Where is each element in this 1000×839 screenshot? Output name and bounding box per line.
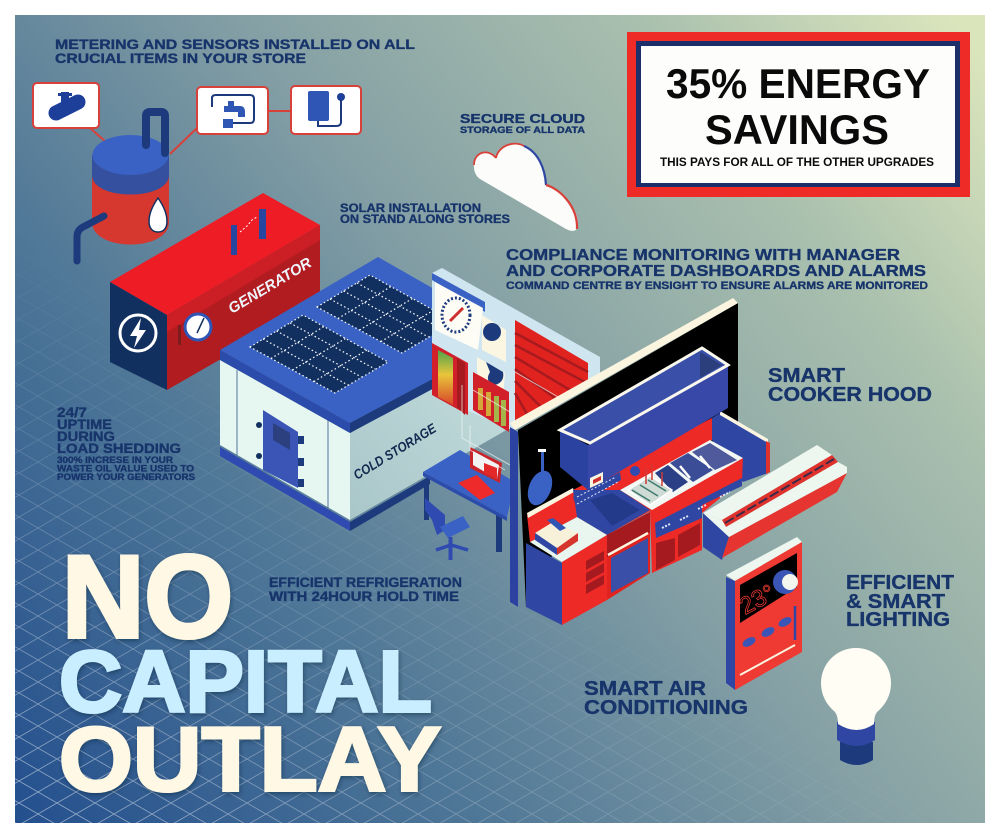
generator label: GENERATOR (225, 254, 315, 317)
icon: water tap sensor (197, 87, 268, 134)
icon: lightning bolt (120, 315, 156, 351)
callout: 35% energy savings (627, 32, 970, 197)
connector lines for sensors (90, 111, 291, 154)
icon: wall sensor device (291, 86, 361, 134)
generator (110, 193, 320, 390)
kitchen counter (526, 418, 743, 625)
temperature readout: 23° (735, 579, 780, 620)
label: uptime: UPTIME (57, 416, 112, 432)
keyboard (458, 475, 495, 500)
icon: cloud (474, 144, 578, 231)
label: efficient lighting: LIGHTING (846, 609, 950, 631)
label: uptime: 24/7 (57, 404, 87, 420)
label: smart air conditioning: SMART AIR (584, 678, 707, 700)
thermostat buttons (741, 615, 793, 649)
label: solar installation: SOLAR INSTALLATION (340, 201, 481, 215)
building label: COLD STORAGE (351, 420, 439, 483)
label: uptime: WASTE OIL VALUE USED TO (57, 464, 194, 474)
label: smart air conditioning (584, 678, 748, 719)
computer monitor (470, 447, 502, 483)
title: no capital outlay: CAPITAL (59, 634, 432, 730)
heading: metering and sensors: METERING AND SENSORS INSTALLED ON ALL (55, 37, 415, 52)
pie card (477, 357, 505, 397)
sink (620, 440, 743, 510)
label: efficient refrigeration: WITH 24HOUR HOLD TIME (269, 589, 459, 604)
label: efficient lighting (846, 572, 954, 631)
label: uptime: DURING (57, 428, 115, 444)
label: uptime: POWER YOUR GENERATORS (57, 472, 195, 482)
till (535, 518, 578, 555)
label: solar installation: ON STAND ALONG STORES (340, 212, 510, 226)
label: efficient refrigeration: EFFICIENT REFRIGERATION (269, 575, 462, 590)
callout: 35% energy savings: THIS PAYS FOR ALL OF THE OTHER UPGRADES (660, 157, 934, 169)
label: secure cloud: SECURE CLOUD (460, 111, 585, 126)
desk chair (425, 498, 470, 560)
data connector lines (462, 372, 560, 470)
oven (607, 512, 650, 600)
kitchen wall (510, 298, 738, 607)
cold storage building (220, 257, 515, 531)
heading: metering and sensors (55, 37, 415, 66)
label: secure cloud (460, 111, 586, 135)
bar chart (473, 372, 509, 432)
label: efficient lighting: EFFICIENT (846, 572, 954, 594)
callout: 35% energy savings: 35% ENERGY (666, 60, 930, 107)
icon: light bulb (821, 648, 891, 765)
desk with computer (423, 447, 515, 552)
heading: metering and sensors: CRUCIAL ITEMS IN YOUR STORE (55, 51, 306, 66)
air conditioner unit (703, 445, 847, 560)
label: smart cooker hood (768, 365, 932, 406)
label: secure cloud: STORAGE OF ALL DATA (460, 125, 586, 135)
cooker hood (560, 348, 728, 490)
label: compliance monitoring: AND CORPORATE DASHBOARDS AND ALARMS (506, 263, 926, 280)
label: efficient refrigeration (269, 575, 462, 604)
counter drawers (562, 535, 607, 625)
label: compliance monitoring: COMMAND CENTRE BY ENSIGHT TO ENSURE ALARMS ARE MONITORED (506, 280, 928, 292)
label: uptime: 300% INCRESE IN YOUR (57, 455, 174, 465)
red louvre chart (515, 320, 588, 422)
title: no capital outlay: NO (62, 531, 233, 662)
hanging pan (523, 449, 557, 509)
thermostat (726, 537, 802, 690)
countertop (530, 517, 607, 562)
title: no capital outlay (59, 531, 441, 810)
label: compliance monitoring (506, 247, 928, 292)
dashboard display panel (432, 268, 600, 470)
level meter (432, 343, 468, 415)
title: no capital outlay: OUTLAY (59, 710, 441, 810)
icon: flow meter sensor (33, 83, 99, 128)
callout: 35% energy savings: SAVINGS (705, 106, 889, 153)
icon: generator gauge (178, 314, 211, 345)
icon: water tank (77, 112, 169, 261)
solar panel (250, 315, 388, 393)
dish rack (628, 464, 672, 505)
cold room door (256, 410, 304, 488)
label: uptime: LOAD SHEDDING (57, 440, 181, 456)
gauge card (435, 282, 483, 350)
counter side (526, 543, 562, 625)
generator terminals (231, 209, 266, 255)
under-sink cabinet (650, 458, 743, 573)
label: smart cooker hood: SMART (768, 365, 845, 387)
dial card (482, 315, 506, 362)
dial (773, 570, 798, 594)
label: compliance monitoring: COMPLIANCE MONITORING WITH MANAGER (506, 247, 900, 264)
label: solar installation (340, 201, 510, 226)
label: smart air conditioning: CONDITIONING (584, 697, 748, 719)
label: smart cooker hood: COOKER HOOD (768, 384, 932, 406)
solar panel (317, 275, 455, 353)
kitchen right side wall (712, 411, 770, 482)
label: efficient lighting: & SMART (846, 591, 945, 613)
label: uptime (57, 404, 195, 482)
